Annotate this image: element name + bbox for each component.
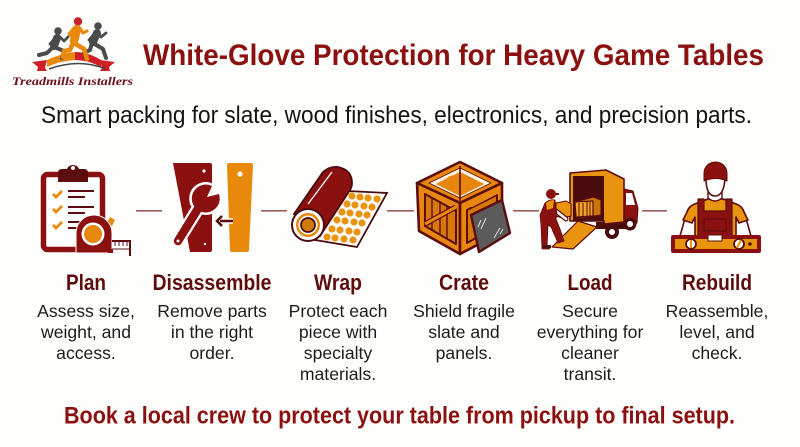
text: Plan description: Assess size, bbox=[37, 301, 135, 321]
icon: wrap roll bbox=[292, 167, 387, 247]
text: Disassemble description: Remove parts bbox=[157, 301, 267, 321]
logo banner bbox=[32, 52, 115, 71]
text: Load description: Secure bbox=[562, 301, 618, 321]
text: Rebuild description: Reassemble, bbox=[666, 301, 768, 321]
icon: clipboard and tape measure bbox=[44, 165, 130, 256]
text: Wrap description: specialty bbox=[304, 343, 372, 363]
icon: worker with spirit level bbox=[671, 162, 761, 253]
logo wordmark: Treadmills Installers bbox=[12, 74, 133, 88]
heading: Disassemble: Disassemble bbox=[152, 270, 272, 295]
call to action: Book a local crew to protect your table from pickup to final setup. bbox=[64, 402, 735, 430]
text: Rebuild description: level, and bbox=[679, 322, 755, 342]
text: Disassemble description: order. bbox=[190, 343, 234, 363]
text: Plan description: access. bbox=[56, 343, 116, 363]
heading: Plan: Plan bbox=[66, 270, 106, 295]
icon: moving truck and worker bbox=[540, 170, 638, 249]
text: Plan description: weight, and bbox=[40, 322, 131, 342]
text: Load description: everything for bbox=[537, 322, 643, 342]
connector: load to rebuild bbox=[642, 210, 667, 212]
heading: Rebuild: Rebuild bbox=[682, 270, 752, 295]
heading: Crate: Crate bbox=[439, 270, 489, 295]
text: Crate description: panels. bbox=[436, 343, 492, 363]
heading: Load: Load bbox=[568, 270, 612, 295]
logo: Treadmills Installers bbox=[12, 17, 133, 88]
subtitle: Smart packing for slate, wood finishes, electronics, and precision parts. bbox=[41, 102, 752, 129]
text: Disassemble description: in the right bbox=[171, 322, 253, 342]
logo runners bbox=[39, 17, 106, 59]
icon: crate with glass panel bbox=[417, 162, 510, 254]
heading: Wrap: Wrap bbox=[314, 270, 362, 295]
text: Load description: transit. bbox=[564, 364, 616, 384]
text: Wrap description: Protect each bbox=[289, 301, 387, 321]
connector: crate to load bbox=[513, 210, 539, 212]
text: Crate description: slate and bbox=[428, 322, 500, 342]
connector: plan to disassemble bbox=[136, 210, 162, 212]
text: Wrap description: piece with bbox=[299, 322, 377, 342]
text: Rebuild description: check. bbox=[692, 343, 742, 363]
text: Crate description: Shield fragile bbox=[413, 301, 515, 321]
text: Load description: cleaner bbox=[561, 343, 619, 363]
title: White-Glove Protection for Heavy Game Tables bbox=[143, 39, 764, 72]
icon: disassembled panels and wrench bbox=[173, 163, 253, 252]
connector: disassemble to wrap bbox=[261, 210, 287, 212]
connector: wrap to crate bbox=[387, 210, 414, 212]
text: Wrap description: materials. bbox=[300, 364, 376, 384]
